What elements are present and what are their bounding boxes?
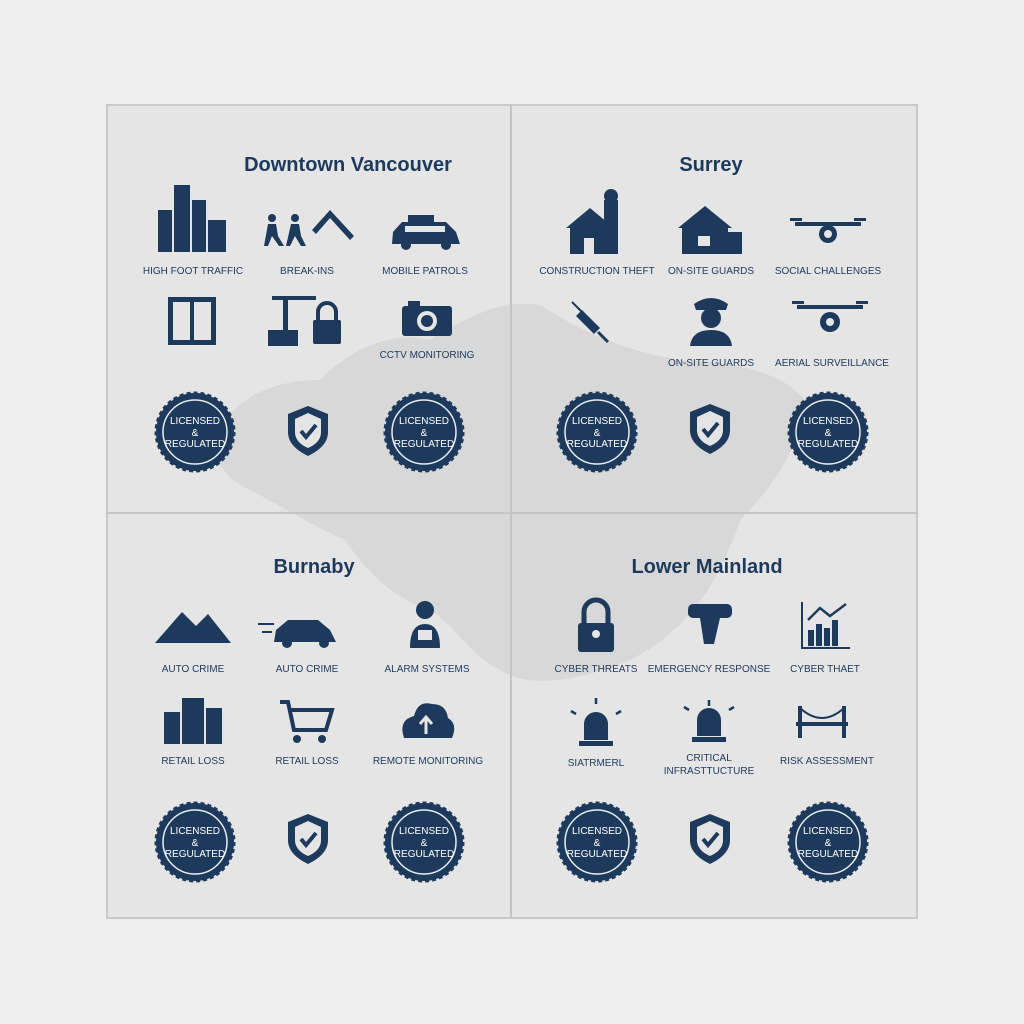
- label: cctv monitoring: CCTV MONITORING: [380, 350, 475, 361]
- title: Burnaby: Burnaby: [273, 556, 355, 578]
- icon: cloud: [402, 703, 454, 738]
- icon: bridge: [796, 706, 848, 738]
- text: &: [421, 428, 428, 439]
- map silhouette: [215, 304, 805, 681]
- icon: broken door: [168, 297, 216, 345]
- text: AUTO CRIME: [276, 664, 339, 675]
- text: REGULATED: [165, 849, 225, 860]
- text: LICENSED: [803, 826, 853, 837]
- icon: alarm light 2: [684, 700, 734, 742]
- text: REGULATED: [798, 849, 858, 860]
- icon: break-ins: [264, 210, 354, 246]
- icon: mountains: [155, 612, 231, 643]
- icon: syringe: [572, 302, 608, 342]
- icon: person tablet: [410, 601, 440, 648]
- label: social challenges: SOCIAL CHALLENGES: [775, 266, 881, 277]
- text: REGULATED: [394, 439, 454, 450]
- badges TR: REGULATED: [567, 439, 627, 450]
- text: LICENSED: [572, 826, 622, 837]
- background frame: [107, 105, 917, 918]
- badges TR: [558, 393, 636, 471]
- badges TL: &: [192, 428, 199, 439]
- icon: camera: [402, 301, 452, 336]
- icon: guard: [690, 298, 732, 346]
- badges TR: LICENSED: [572, 416, 622, 427]
- label: high foot traffic: HIGH FOOT TRAFFIC: [143, 266, 243, 277]
- label: aerial surveillance: AERIAL SURVEILLANCE: [775, 358, 889, 369]
- icon: speeding car: [258, 620, 336, 648]
- label: on-site guards: ON-SITE GUARDS: [668, 266, 754, 277]
- icon: drone: [790, 218, 866, 243]
- label: construction theft: CONSTRUCTION THEFT: [539, 266, 655, 277]
- badges TL: REGULATED: [165, 439, 225, 450]
- icon: crane lock: [268, 296, 341, 346]
- label: mobile patrols: MOBILE PATROLS: [382, 266, 468, 277]
- text: RETAIL LOSS: [161, 756, 225, 767]
- text: CYBER THREATS: [555, 664, 638, 675]
- badges TL: [156, 393, 234, 471]
- text: &: [421, 838, 428, 849]
- icon: house: [678, 206, 742, 254]
- text: &: [594, 838, 601, 849]
- text: RISK ASSESSMENT: [780, 756, 874, 767]
- text: &: [192, 838, 199, 849]
- icon: cart: [280, 702, 332, 743]
- shield: [288, 406, 328, 456]
- text: EMERGENCY RESPONSE: [648, 664, 771, 675]
- icon: chart: [802, 602, 850, 648]
- icon: house clock: [566, 189, 618, 254]
- text: &: [825, 428, 832, 439]
- text: RETAIL LOSS: [275, 756, 339, 767]
- label: break-ins: BREAK-INS: [280, 266, 334, 277]
- icon: patrol car: [392, 215, 460, 250]
- text: LICENSED: [399, 826, 449, 837]
- text: SIATRMERL: [568, 758, 625, 769]
- icon: building: [164, 698, 222, 744]
- text: LICENSED: [803, 416, 853, 427]
- text: LICENSED: [399, 416, 449, 427]
- icon: alarm light: [571, 698, 621, 746]
- badges TL: LICENSED: [170, 416, 220, 427]
- text: REGULATED: [567, 849, 627, 860]
- icon: lock: [578, 600, 614, 652]
- text: LICENSED: [170, 826, 220, 837]
- icon: drone 2: [792, 301, 868, 332]
- text: INFRASTTUCTURE: [664, 766, 755, 777]
- text: REGULATED: [394, 849, 454, 860]
- badges TR: &: [594, 428, 601, 439]
- text: REGULATED: [798, 439, 858, 450]
- title: Lower Mainland: Lower Mainland: [631, 556, 783, 578]
- title: Downtown Vancouver: Downtown Vancouver: [244, 154, 452, 176]
- title: Surrey: Surrey: [679, 154, 744, 176]
- text: CYBER THAET: [790, 664, 860, 675]
- text: REMOTE MONITORING: [373, 756, 483, 767]
- text: CRITICAL: [686, 753, 732, 764]
- text: AUTO CRIME: [162, 664, 225, 675]
- label: on-site guards 2: ON-SITE GUARDS: [668, 358, 754, 369]
- icon: emergency: [688, 604, 732, 644]
- text: ALARM SYSTEMS: [384, 664, 470, 675]
- text: &: [825, 838, 832, 849]
- icon: buildings: [158, 185, 226, 252]
